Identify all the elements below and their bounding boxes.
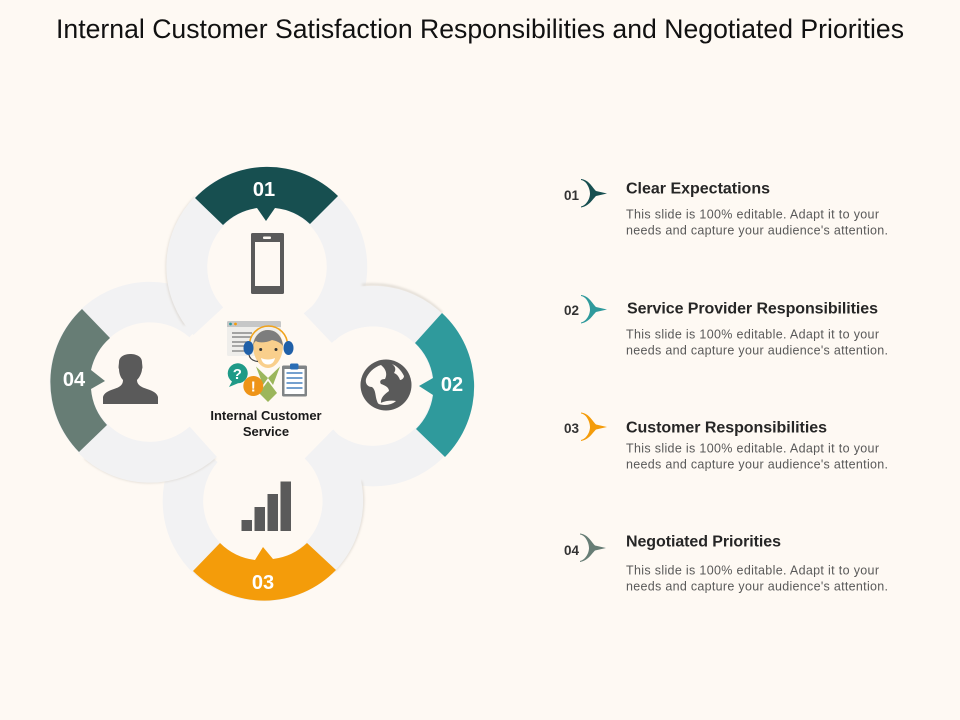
body 03: This slide is 100% editable. Adapt it to your bbox=[626, 442, 879, 456]
list item 02 bbox=[564, 295, 888, 358]
number 04: 04 bbox=[564, 543, 580, 558]
exclamation badge: ! bbox=[251, 378, 256, 396]
ring 4 band bbox=[70, 302, 203, 462]
number 03: 03 bbox=[564, 421, 580, 436]
agent tie and collar bbox=[256, 366, 280, 402]
question bubble: ? bbox=[233, 366, 242, 383]
center label bbox=[210, 408, 322, 439]
segment 04 bbox=[50, 309, 110, 452]
number 01: 01 bbox=[564, 188, 580, 203]
body 02: This slide is 100% editable. Adapt it to your bbox=[626, 328, 879, 342]
ring 3 band bbox=[183, 444, 343, 581]
body 01: needs and capture your audience's attention. bbox=[626, 224, 888, 238]
ring 1 band bbox=[187, 187, 347, 326]
heading 03: Customer Responsibilities bbox=[626, 420, 827, 436]
body 03: needs and capture your audience's attention. bbox=[626, 458, 888, 472]
body 01 bbox=[626, 208, 888, 238]
segment numbers: 01 bbox=[253, 179, 275, 201]
segment 02 bbox=[415, 313, 474, 457]
ring overlaps bbox=[93, 210, 430, 557]
heading 04: Negotiated Priorities bbox=[626, 534, 781, 550]
agent face bbox=[253, 330, 283, 368]
body 04 bbox=[626, 564, 888, 594]
body 04: needs and capture your audience's attention. bbox=[626, 580, 888, 594]
connector 03 bbox=[581, 412, 607, 441]
body 03 bbox=[626, 442, 888, 472]
body 04: This slide is 100% editable. Adapt it to your bbox=[626, 564, 879, 578]
center: customer service illustration bbox=[227, 321, 307, 402]
list item 04 bbox=[564, 534, 888, 594]
list item 03 bbox=[564, 412, 888, 472]
body 02: needs and capture your audience's attention. bbox=[626, 344, 888, 358]
diagram: four interlocking rings bbox=[50, 167, 474, 601]
ring 2 band bbox=[318, 306, 453, 466]
segment numbers: 02 bbox=[441, 374, 463, 396]
ring shadows bbox=[85, 197, 442, 571]
number 02: 02 bbox=[564, 303, 579, 318]
heading 01: Clear Expectations bbox=[626, 180, 770, 198]
connector 01 bbox=[581, 179, 607, 208]
segment numbers: 03 bbox=[252, 572, 274, 594]
segment numbers bbox=[63, 179, 463, 594]
browser window bbox=[227, 321, 281, 356]
center label: Service bbox=[243, 424, 289, 439]
icon: person bbox=[103, 354, 158, 404]
center label: Internal Customer bbox=[210, 408, 322, 423]
body 02 bbox=[626, 328, 888, 358]
headset bbox=[244, 326, 294, 362]
list item 01 bbox=[564, 179, 888, 238]
heading 02: Service Provider Responsibilities bbox=[627, 300, 878, 318]
segment 03 bbox=[193, 543, 336, 601]
icon: smartphone bbox=[251, 233, 284, 294]
connector 04 bbox=[580, 534, 606, 562]
title: Internal Customer Satisfaction Responsibilities and Negotiated Priorities bbox=[56, 14, 904, 44]
clipboard bbox=[282, 364, 307, 396]
segment numbers: 04 bbox=[63, 369, 86, 391]
connector 02 bbox=[581, 295, 607, 324]
icon: globe bbox=[360, 360, 412, 410]
body 01: This slide is 100% editable. Adapt it to your bbox=[626, 208, 879, 222]
segment 01 bbox=[195, 167, 338, 225]
icon: signal bars bbox=[242, 482, 291, 531]
